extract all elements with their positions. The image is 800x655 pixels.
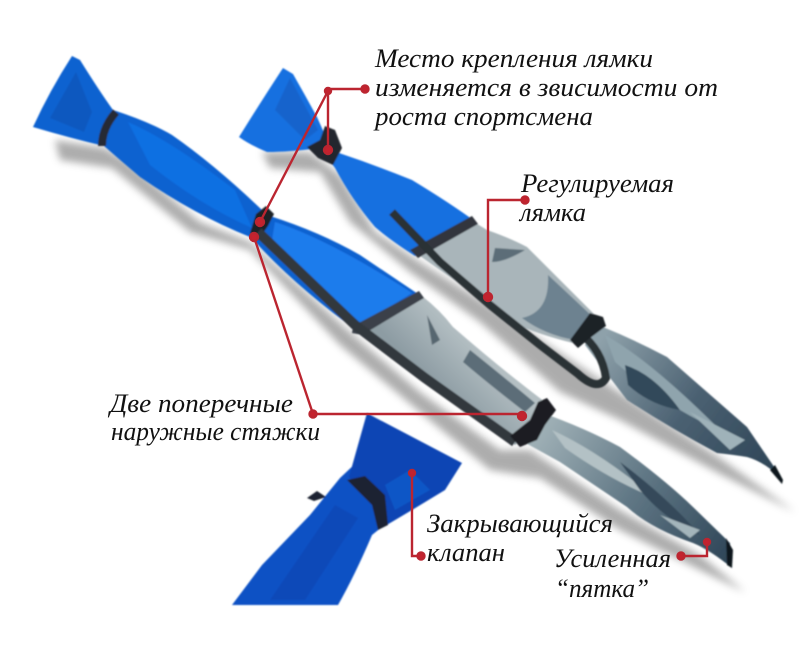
tail tip (770, 465, 783, 484)
body shade (270, 505, 358, 600)
label: outer ties: наружные стяжки (111, 417, 320, 446)
tail tip (726, 538, 733, 568)
bag body (232, 462, 388, 605)
blue body (239, 68, 476, 256)
tail section (520, 412, 732, 568)
lower panel highlight (272, 222, 412, 324)
label: strap mount: изменяется в звисимости от (375, 73, 718, 102)
label: strap mount: Место крепления лямки (374, 44, 653, 73)
band (410, 216, 478, 258)
top tie strap (102, 112, 116, 146)
inset: closing flap close-up (232, 413, 462, 605)
label: closing flap (427, 509, 613, 567)
grey section (420, 222, 600, 343)
side tab (307, 491, 326, 501)
adjustable strap and loop (392, 212, 606, 384)
lower tie (510, 398, 556, 447)
blue body (33, 56, 424, 333)
leader: heel (678, 539, 710, 560)
label: heel: “пятка” (555, 574, 649, 603)
leader: closing flap (409, 470, 424, 560)
label: heel (554, 544, 671, 603)
label: heel: Усиленная (554, 544, 671, 573)
band (352, 291, 424, 335)
waist tie (250, 206, 274, 240)
cone fold (275, 78, 318, 140)
label: closing flap: Закрывающийся (427, 509, 613, 538)
tail folds (552, 430, 655, 498)
label: adjustable strap: лямка (518, 198, 586, 227)
flap (349, 413, 462, 526)
label: strap mount: роста спортсмена (373, 102, 593, 131)
grey folds (463, 350, 535, 412)
upper panel highlight (128, 122, 252, 228)
bag 1: left ski bag (33, 56, 733, 568)
tie strap (347, 476, 388, 530)
neck tie (307, 126, 342, 165)
bag 2: right ski bag (239, 68, 783, 484)
leader: strap mount (256, 86, 368, 226)
long strap (258, 232, 515, 442)
shadows (55, 140, 795, 592)
label: closing flap: клапан (427, 538, 505, 567)
label: adjustable strap (518, 169, 674, 227)
label: adjustable strap: Регулируемая (520, 169, 674, 198)
leader: adjustable strap (484, 196, 528, 301)
label: outer ties: Две поперечные (107, 389, 293, 418)
grey folds (522, 275, 596, 340)
leader: outer ties (250, 233, 526, 420)
cone fold (50, 72, 92, 132)
tail folds (605, 335, 720, 430)
flap highlight (385, 470, 430, 510)
strap buckle (570, 313, 606, 348)
label: strap mount (373, 44, 718, 131)
grey section (362, 296, 545, 445)
tail section (585, 322, 783, 480)
label: outer ties (107, 389, 320, 446)
